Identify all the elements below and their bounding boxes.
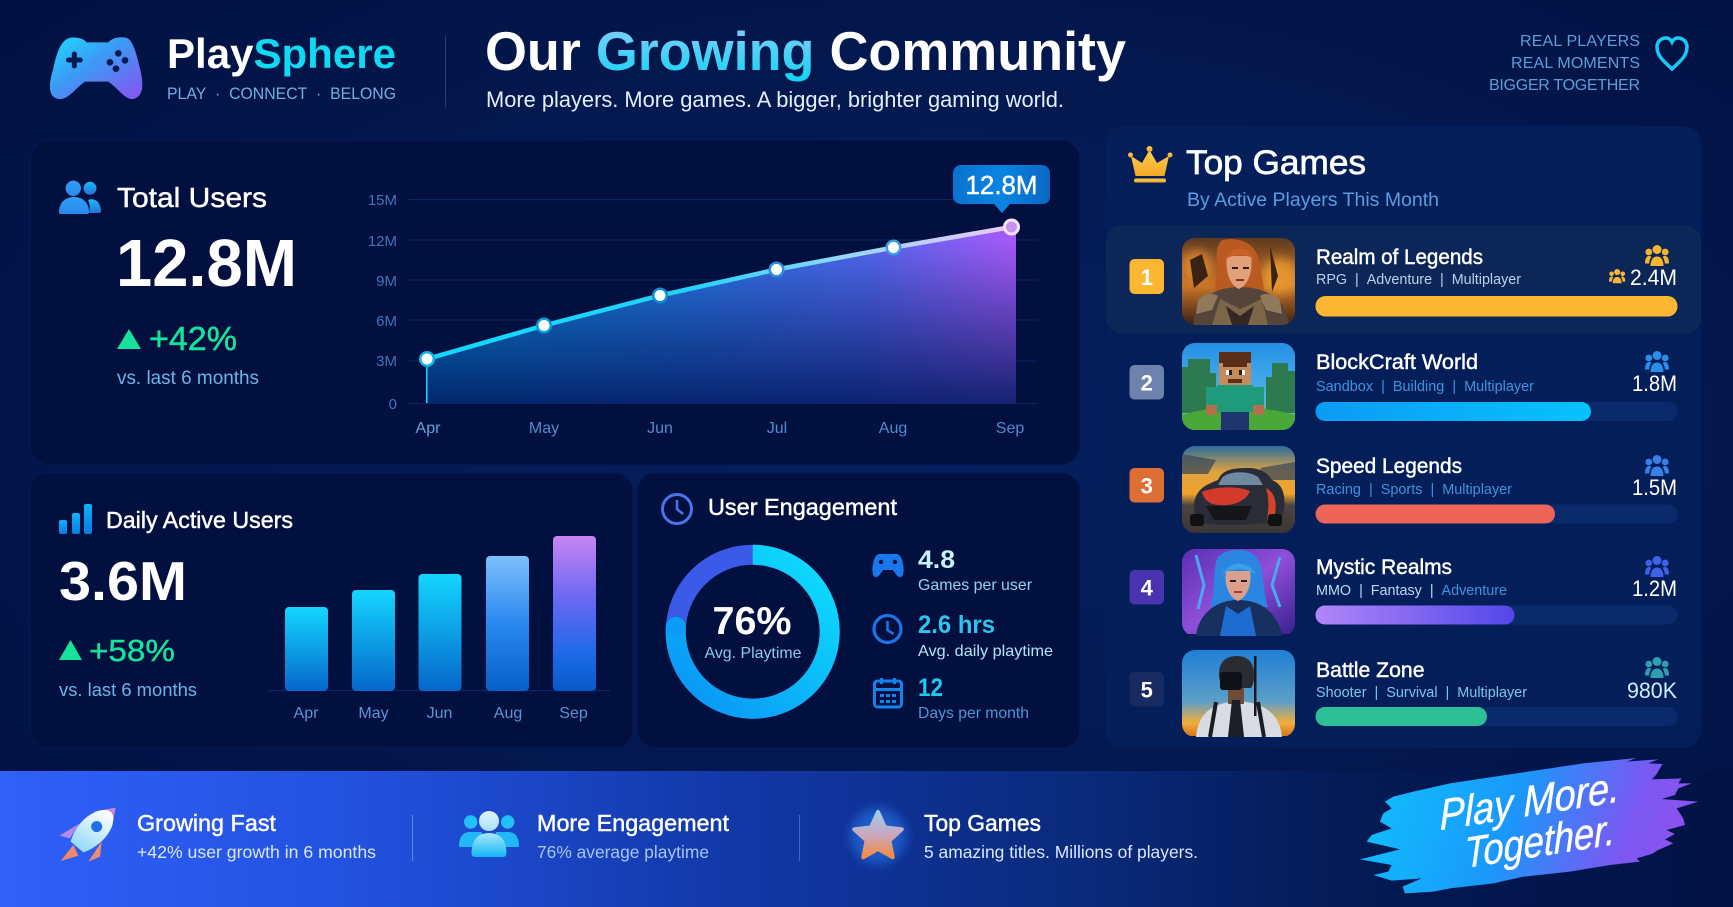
bar labels: Apr <box>294 705 319 722</box>
game art: block character <box>1182 343 1295 430</box>
y axis labels: 12M <box>368 233 397 250</box>
game title: BlockCraft World <box>1316 351 1478 374</box>
player count: 1.2M <box>1632 576 1677 601</box>
game title: Mystic Realms <box>1316 556 1452 579</box>
x axis labels: Sep <box>996 420 1024 437</box>
y axis labels: 6M <box>376 313 397 330</box>
x axis labels <box>416 420 1024 437</box>
stat: daily playtime <box>874 611 1053 660</box>
player count: 1.8M <box>1632 371 1677 396</box>
footer band <box>0 771 1733 907</box>
icon: calendar <box>874 678 902 707</box>
panel: user engagement <box>637 473 1080 748</box>
progress bar <box>1316 606 1678 624</box>
value: 12.8M <box>116 226 297 301</box>
panel: total users <box>30 140 1080 465</box>
panel: top games <box>1106 126 1701 748</box>
feature: top games: Top Games <box>924 810 1041 836</box>
row: Realm of Legends <box>1130 238 1678 325</box>
stat: games per user: Games per user <box>918 577 1033 594</box>
progress bar <box>1316 707 1678 726</box>
comparison note: vs. last 6 months <box>117 368 259 389</box>
y axis labels: 0 <box>389 396 397 413</box>
icon: users <box>59 181 101 214</box>
y axis labels <box>368 192 397 413</box>
game art: sorceress <box>1182 549 1295 636</box>
y axis labels: 9M <box>376 273 397 290</box>
feature: top games <box>850 808 1198 864</box>
slogan text: BIGGER TOGETHER <box>1489 77 1640 94</box>
rank badge: 4 <box>1141 576 1154 600</box>
stat: days per month: Days per month <box>918 705 1029 722</box>
game title: Speed Legends <box>1316 455 1462 478</box>
player count: 2.4M <box>1630 265 1677 290</box>
x axis labels: Apr <box>416 420 441 437</box>
bar chart: daily active users <box>268 536 610 722</box>
progress bar <box>1316 402 1678 421</box>
rank badge: 3 <box>1141 474 1153 498</box>
header: title block <box>485 20 1126 112</box>
feature: more engagement: 76% average playtime <box>537 842 709 862</box>
line chart: total users <box>368 165 1050 437</box>
player count: 1.5M <box>1632 475 1677 500</box>
subheading: By Active Players This Month <box>1187 189 1439 211</box>
game art: soldier <box>1182 650 1295 737</box>
icon: bar chart <box>59 504 92 534</box>
rank badge <box>1130 365 1164 400</box>
icon: players <box>1645 455 1669 476</box>
heading: Total Users <box>117 182 267 213</box>
game title: Realm of Legends <box>1316 246 1483 269</box>
feature: growing fast: +42% user growth in 6 months <box>137 842 376 862</box>
icon: players <box>1645 657 1669 678</box>
icon: clock <box>662 494 692 524</box>
rank badge: 5 <box>1141 678 1153 702</box>
y axis labels: 3M <box>376 353 397 370</box>
slogan line one: Play More. <box>1439 763 1620 840</box>
genres: RPG | Adventure | Multiplayer <box>1316 272 1521 288</box>
callout: latest value <box>953 165 1050 213</box>
progress bar <box>1316 504 1678 524</box>
comparison note: vs. last 6 months <box>59 680 197 700</box>
header: slogan <box>1489 33 1687 94</box>
row: Speed Legends <box>1130 446 1678 533</box>
player count: 980K <box>1627 678 1677 703</box>
donut caption: Avg. Playtime <box>704 645 802 662</box>
stat: days per month <box>874 674 1029 722</box>
title: Our Growing Community <box>485 20 1126 82</box>
growth: +42% <box>149 320 237 357</box>
row: BlockCraft World <box>1130 343 1678 430</box>
growth: +58% <box>89 633 175 668</box>
icon: clock <box>874 616 901 642</box>
bar labels: Sep <box>559 705 588 722</box>
callout: latest value: 12.8M <box>966 170 1038 200</box>
rank badge <box>1130 672 1164 706</box>
row: Battle Zone <box>1130 650 1678 737</box>
rank badge <box>1130 570 1164 604</box>
heading: Daily Active Users <box>106 507 293 533</box>
donut value: 76% <box>712 600 792 643</box>
row: Mystic Realms <box>1130 549 1678 636</box>
slogan line two: Together. <box>1464 806 1615 878</box>
feature: growing fast <box>59 808 376 862</box>
bar labels: Aug <box>494 705 522 722</box>
x axis labels: Aug <box>879 420 907 437</box>
tagline: PLAY · CONNECT · BELONG <box>167 85 396 103</box>
progress bar <box>1316 296 1678 316</box>
bar labels <box>294 705 588 722</box>
area fill <box>427 226 1016 404</box>
icon: players <box>1645 556 1669 577</box>
data points <box>419 218 1020 367</box>
subtitle: More players. More games. A bigger, brighter gaming world. <box>486 87 1064 112</box>
icon: gamepad logo <box>50 37 142 99</box>
feature: more engagement <box>459 810 730 862</box>
feature: top games: 5 amazing titles. Millions of players. <box>924 842 1198 862</box>
feature: growing fast: Growing Fast <box>137 810 277 836</box>
x axis labels: Jun <box>647 420 673 437</box>
stat: daily playtime: 2.6 hrs <box>918 611 995 639</box>
icon: crown <box>1128 146 1172 182</box>
slogan text: REAL PLAYERS <box>1520 33 1640 50</box>
growth <box>59 633 175 668</box>
icon: rocket <box>59 808 116 862</box>
y axis labels: 15M <box>368 192 397 209</box>
rank badge <box>1130 259 1164 294</box>
icon: players <box>1645 351 1669 372</box>
slogan text <box>1489 33 1640 94</box>
heading: Top Games <box>1186 144 1366 182</box>
stat: daily playtime: Avg. daily playtime <box>918 643 1053 660</box>
rank badge: 1 <box>1141 265 1153 290</box>
rank badge <box>1130 468 1164 502</box>
callout: brush slogan <box>1360 758 1698 893</box>
genres: Racing | Sports | Multiplayer <box>1316 482 1512 498</box>
genres: MMO | Fantasy | Adventure <box>1316 583 1507 599</box>
game title: Battle Zone <box>1316 659 1424 682</box>
brand name: PlaySphere <box>167 30 396 77</box>
icon: star <box>850 808 906 864</box>
game art: fantasy warrior <box>1180 238 1298 325</box>
stat: games per user: 4.8 <box>918 546 955 574</box>
icon: players <box>1645 245 1669 266</box>
icon: people <box>459 811 519 857</box>
rank badge: 2 <box>1141 370 1153 396</box>
panel: daily active users <box>30 473 633 748</box>
donut chart <box>666 555 830 709</box>
x axis labels: Jul <box>767 420 787 437</box>
stat: games per user <box>872 546 1033 594</box>
bar labels: May <box>358 705 389 722</box>
slogan text: REAL MOMENTS <box>1511 55 1640 72</box>
genres: Shooter | Survival | Multiplayer <box>1316 685 1527 701</box>
value: 3.6M <box>59 550 187 612</box>
game art: race car <box>1182 446 1295 533</box>
trend line <box>427 227 1012 359</box>
genres: Sandbox | Building | Multiplayer <box>1316 379 1534 395</box>
icon: player badge <box>1609 269 1625 283</box>
x axis labels: May <box>529 420 559 437</box>
feature: more engagement: More Engagement <box>537 810 730 836</box>
icon: gamepad <box>872 554 904 577</box>
icon: heart <box>1657 38 1687 69</box>
header: logo <box>50 30 396 103</box>
bar labels: Jun <box>427 705 452 722</box>
stat: days per month: 12 <box>918 674 943 702</box>
heading: User Engagement <box>708 494 898 520</box>
